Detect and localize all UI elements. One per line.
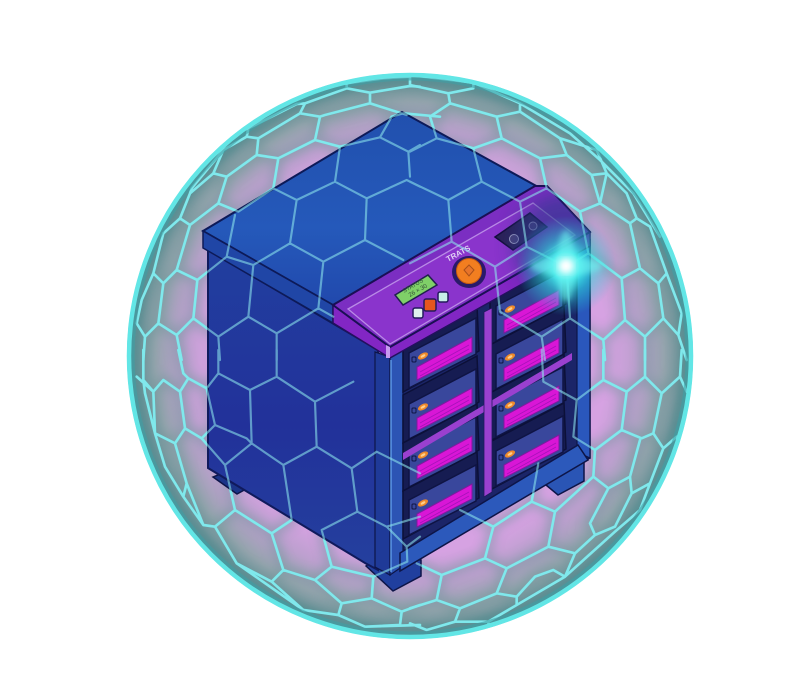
- drawer: right 1: [490, 258, 566, 345]
- cabinet feet: [213, 462, 584, 591]
- drawers: [403, 258, 566, 539]
- drawer: left 1: [403, 305, 479, 392]
- energy glow spark: [516, 216, 616, 316]
- infographic: server inside hexagonal shield sphere: [126, 72, 694, 640]
- bottom rail: [400, 445, 588, 571]
- purple cross divider: [403, 308, 572, 497]
- panel shade near glow: [504, 190, 590, 284]
- front face: [390, 240, 590, 570]
- corner post: [375, 350, 403, 575]
- LCD display: [395, 275, 437, 305]
- LCD display: 26 × 30: [408, 283, 429, 299]
- media slot: [495, 213, 547, 250]
- right post: [577, 243, 590, 458]
- drawer: right 4: [490, 403, 566, 490]
- lid top: [203, 112, 540, 305]
- server cabinet: [203, 112, 617, 591]
- hexagon mesh overlay: [137, 75, 687, 633]
- lid side lip: [203, 231, 333, 323]
- shield sphere body: [127, 73, 693, 639]
- start label: TRATS: [445, 243, 473, 264]
- left side wall: [208, 250, 378, 570]
- start button: [452, 256, 486, 288]
- LCD display: STATUS: [402, 278, 425, 295]
- small buttons: [413, 292, 448, 318]
- drawer: left 4: [403, 452, 479, 539]
- shield rim: [129, 75, 691, 637]
- control panel: [333, 186, 617, 358]
- drawer: right 2: [490, 306, 566, 393]
- drawer: left 2: [403, 356, 479, 443]
- drawer: left 3: [403, 404, 479, 491]
- drawer: right 3: [490, 354, 566, 441]
